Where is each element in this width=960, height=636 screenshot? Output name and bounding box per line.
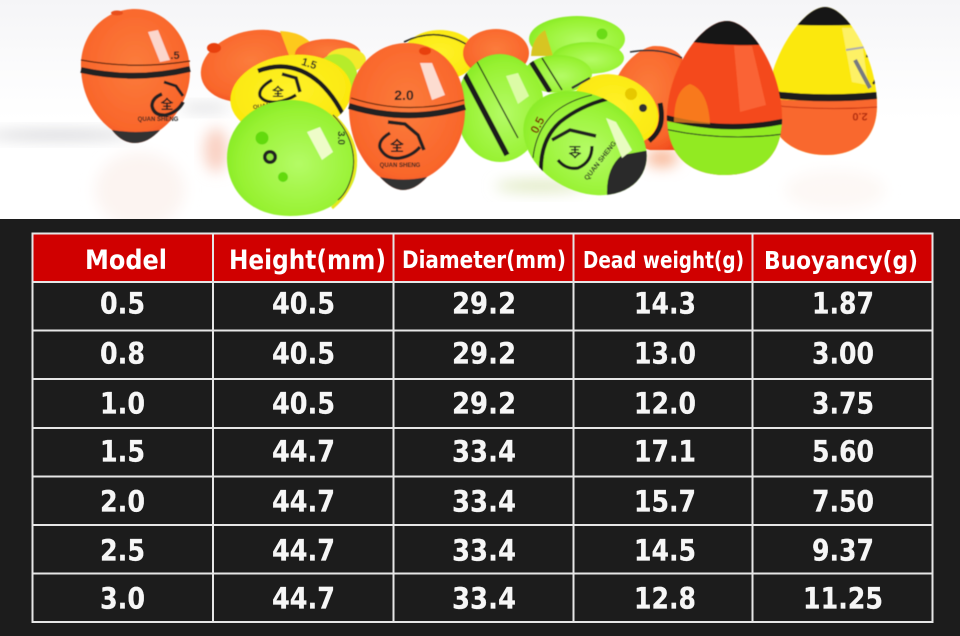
float: green 3.0: 3.0 — [335, 131, 346, 145]
row 1.5 — [100, 434, 874, 468]
float: green 0.5: QUAN SHENG — [583, 140, 619, 182]
row 1.0: 3.75 — [812, 386, 874, 420]
row 2.0: 2.0 — [100, 484, 145, 518]
row 1.5: 17.1 — [634, 434, 696, 468]
product photo: fishing floats — [0, 0, 960, 228]
row 0.8 — [100, 336, 874, 370]
float: green 0.5: 全 — [568, 144, 582, 159]
float: yellow and orange egg — [772, 6, 878, 156]
row 0.8: 40.5 — [272, 336, 335, 370]
float: yellow 1.5 — [230, 54, 352, 122]
row 2.5: 9.37 — [812, 534, 874, 568]
float: orange 2.0: QUAN SHENG — [380, 163, 421, 169]
float: green 3.0 — [227, 100, 357, 216]
row 1.5: 1.5 — [100, 434, 145, 468]
row 2.0: 15.7 — [634, 484, 696, 518]
float: yellow and orange egg: 2.0 — [852, 110, 868, 122]
float: green 0.5 — [523, 90, 648, 196]
row 2.5: 2.5 — [100, 534, 145, 568]
row 3.0: 33.4 — [452, 582, 516, 616]
row 1.5: 5.60 — [812, 434, 874, 468]
row 2.0: 7.50 — [812, 484, 874, 518]
float: green 0.5: 0.5 — [527, 114, 548, 136]
row 0.8: 29.2 — [452, 336, 516, 370]
row 0.5: 0.5 — [100, 286, 145, 320]
float: orange 0.5: .5 — [170, 50, 180, 62]
row 1.0: 1.0 — [100, 386, 145, 420]
row 2.0 — [100, 484, 874, 518]
float: yellow 1.5: 1.5 — [300, 56, 318, 72]
row 3.0: 3.0 — [100, 582, 145, 616]
row 3.0: 12.8 — [634, 582, 696, 616]
header labels: Height(mm) — [229, 245, 386, 276]
table background — [32, 233, 933, 622]
row 3.0 — [100, 582, 883, 616]
row 2.5: 44.7 — [272, 534, 335, 568]
row 1.5: 44.7 — [272, 434, 335, 468]
header labels: Model — [85, 245, 167, 276]
specification table — [32, 233, 933, 622]
row 2.0: 44.7 — [272, 484, 335, 518]
row 0.8: 0.8 — [100, 336, 145, 370]
row 0.5: 1.87 — [812, 286, 874, 320]
header labels: Buoyancy(g) — [764, 246, 918, 275]
row 3.0: 44.7 — [272, 582, 335, 616]
row 1.0: 12.0 — [634, 386, 696, 420]
float: orange 2.0: 全 — [390, 138, 404, 154]
row 0.5 — [100, 286, 874, 320]
row 2.5 — [100, 534, 874, 568]
row 1.0: 40.5 — [272, 386, 335, 420]
back floats — [193, 16, 685, 150]
header labels: Dead weight(g) — [583, 248, 744, 274]
float: orange 0.5: 全 — [160, 97, 174, 112]
row 2.0: 33.4 — [452, 484, 516, 518]
header labels — [85, 245, 918, 276]
row 0.8: 3.00 — [812, 336, 874, 370]
header labels: Diameter(mm) — [402, 246, 566, 274]
row 0.5: 40.5 — [272, 286, 335, 320]
float: yellow 1.5: 全 — [272, 84, 284, 99]
row 1.5: 33.4 — [452, 434, 516, 468]
shadows and reflections — [0, 104, 885, 228]
row 1.0 — [100, 386, 874, 420]
header row background — [33, 234, 932, 281]
row 2.5: 14.5 — [634, 534, 696, 568]
float: orange 2.0 — [349, 43, 465, 190]
float: yellow 1.5: QUAN — [253, 103, 271, 111]
row 0.8: 13.0 — [634, 336, 696, 370]
row 2.5: 33.4 — [452, 534, 516, 568]
row 1.0: 29.2 — [452, 386, 516, 420]
float: yellow with holes — [571, 73, 660, 142]
float: orange 2.0: 2.0 — [394, 87, 414, 103]
float: green striped — [456, 54, 544, 162]
row 0.5: 14.3 — [634, 286, 696, 320]
row 3.0: 11.25 — [803, 582, 883, 616]
float: orange 0.5 — [81, 9, 190, 143]
float: orange 0.5: QUAN SHENG — [138, 117, 179, 123]
row 0.5: 29.2 — [452, 286, 516, 320]
float: orange and green egg — [666, 20, 783, 176]
